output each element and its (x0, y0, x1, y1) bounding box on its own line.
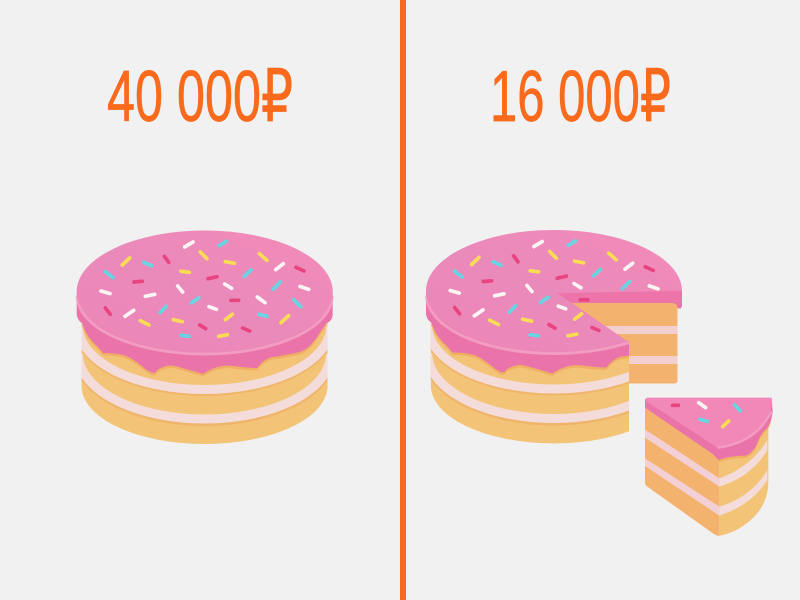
icon: cake with a slice removed (426, 230, 682, 443)
cut wall of the cake (557, 290, 682, 384)
icon: cut cake slice (645, 398, 773, 536)
top of the cake with wedge removed (426, 230, 682, 352)
price: slices: 16 000₽ (490, 57, 671, 137)
price: whole cake: 40 000₽ (107, 57, 293, 137)
vertical divider (400, 0, 406, 600)
icon: whole cake (77, 230, 333, 444)
